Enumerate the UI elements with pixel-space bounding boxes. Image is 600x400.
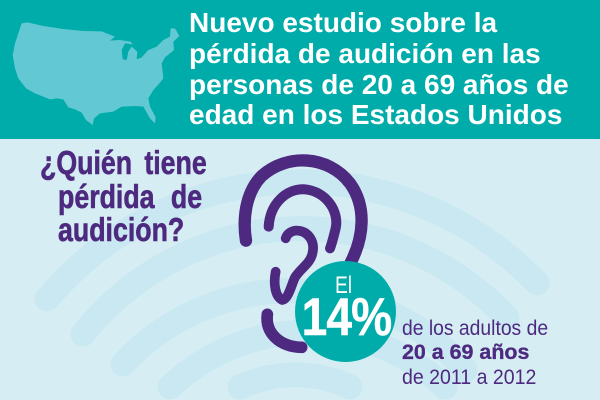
title <box>189 7 569 130</box>
title: edad en los Estados Unidos <box>189 99 562 130</box>
label: El: El <box>335 272 352 299</box>
figure: 14%: 14% <box>302 288 391 347</box>
title: Nuevo estudio sobre la <box>189 7 497 38</box>
title: pérdida de audición en las <box>189 38 541 69</box>
callout: 14% circle <box>295 261 396 362</box>
text: adults age range and years: 20 a 69 años <box>402 341 529 364</box>
heading: question: pérdida de <box>58 178 202 214</box>
heading: question: audición? <box>58 211 184 248</box>
title: personas de 20 a 69 años de <box>189 69 569 100</box>
icon: ear <box>238 154 368 354</box>
icon: map of United States <box>12 22 180 125</box>
text: adults age range and years: de 2011 a 2012 <box>402 366 536 389</box>
heading: question <box>40 144 207 248</box>
header band <box>0 0 600 139</box>
heading: question: ¿Quién tiene <box>40 144 207 181</box>
text: adults age range and years: de los adultos de <box>402 317 548 340</box>
text: adults age range and years <box>402 317 548 389</box>
